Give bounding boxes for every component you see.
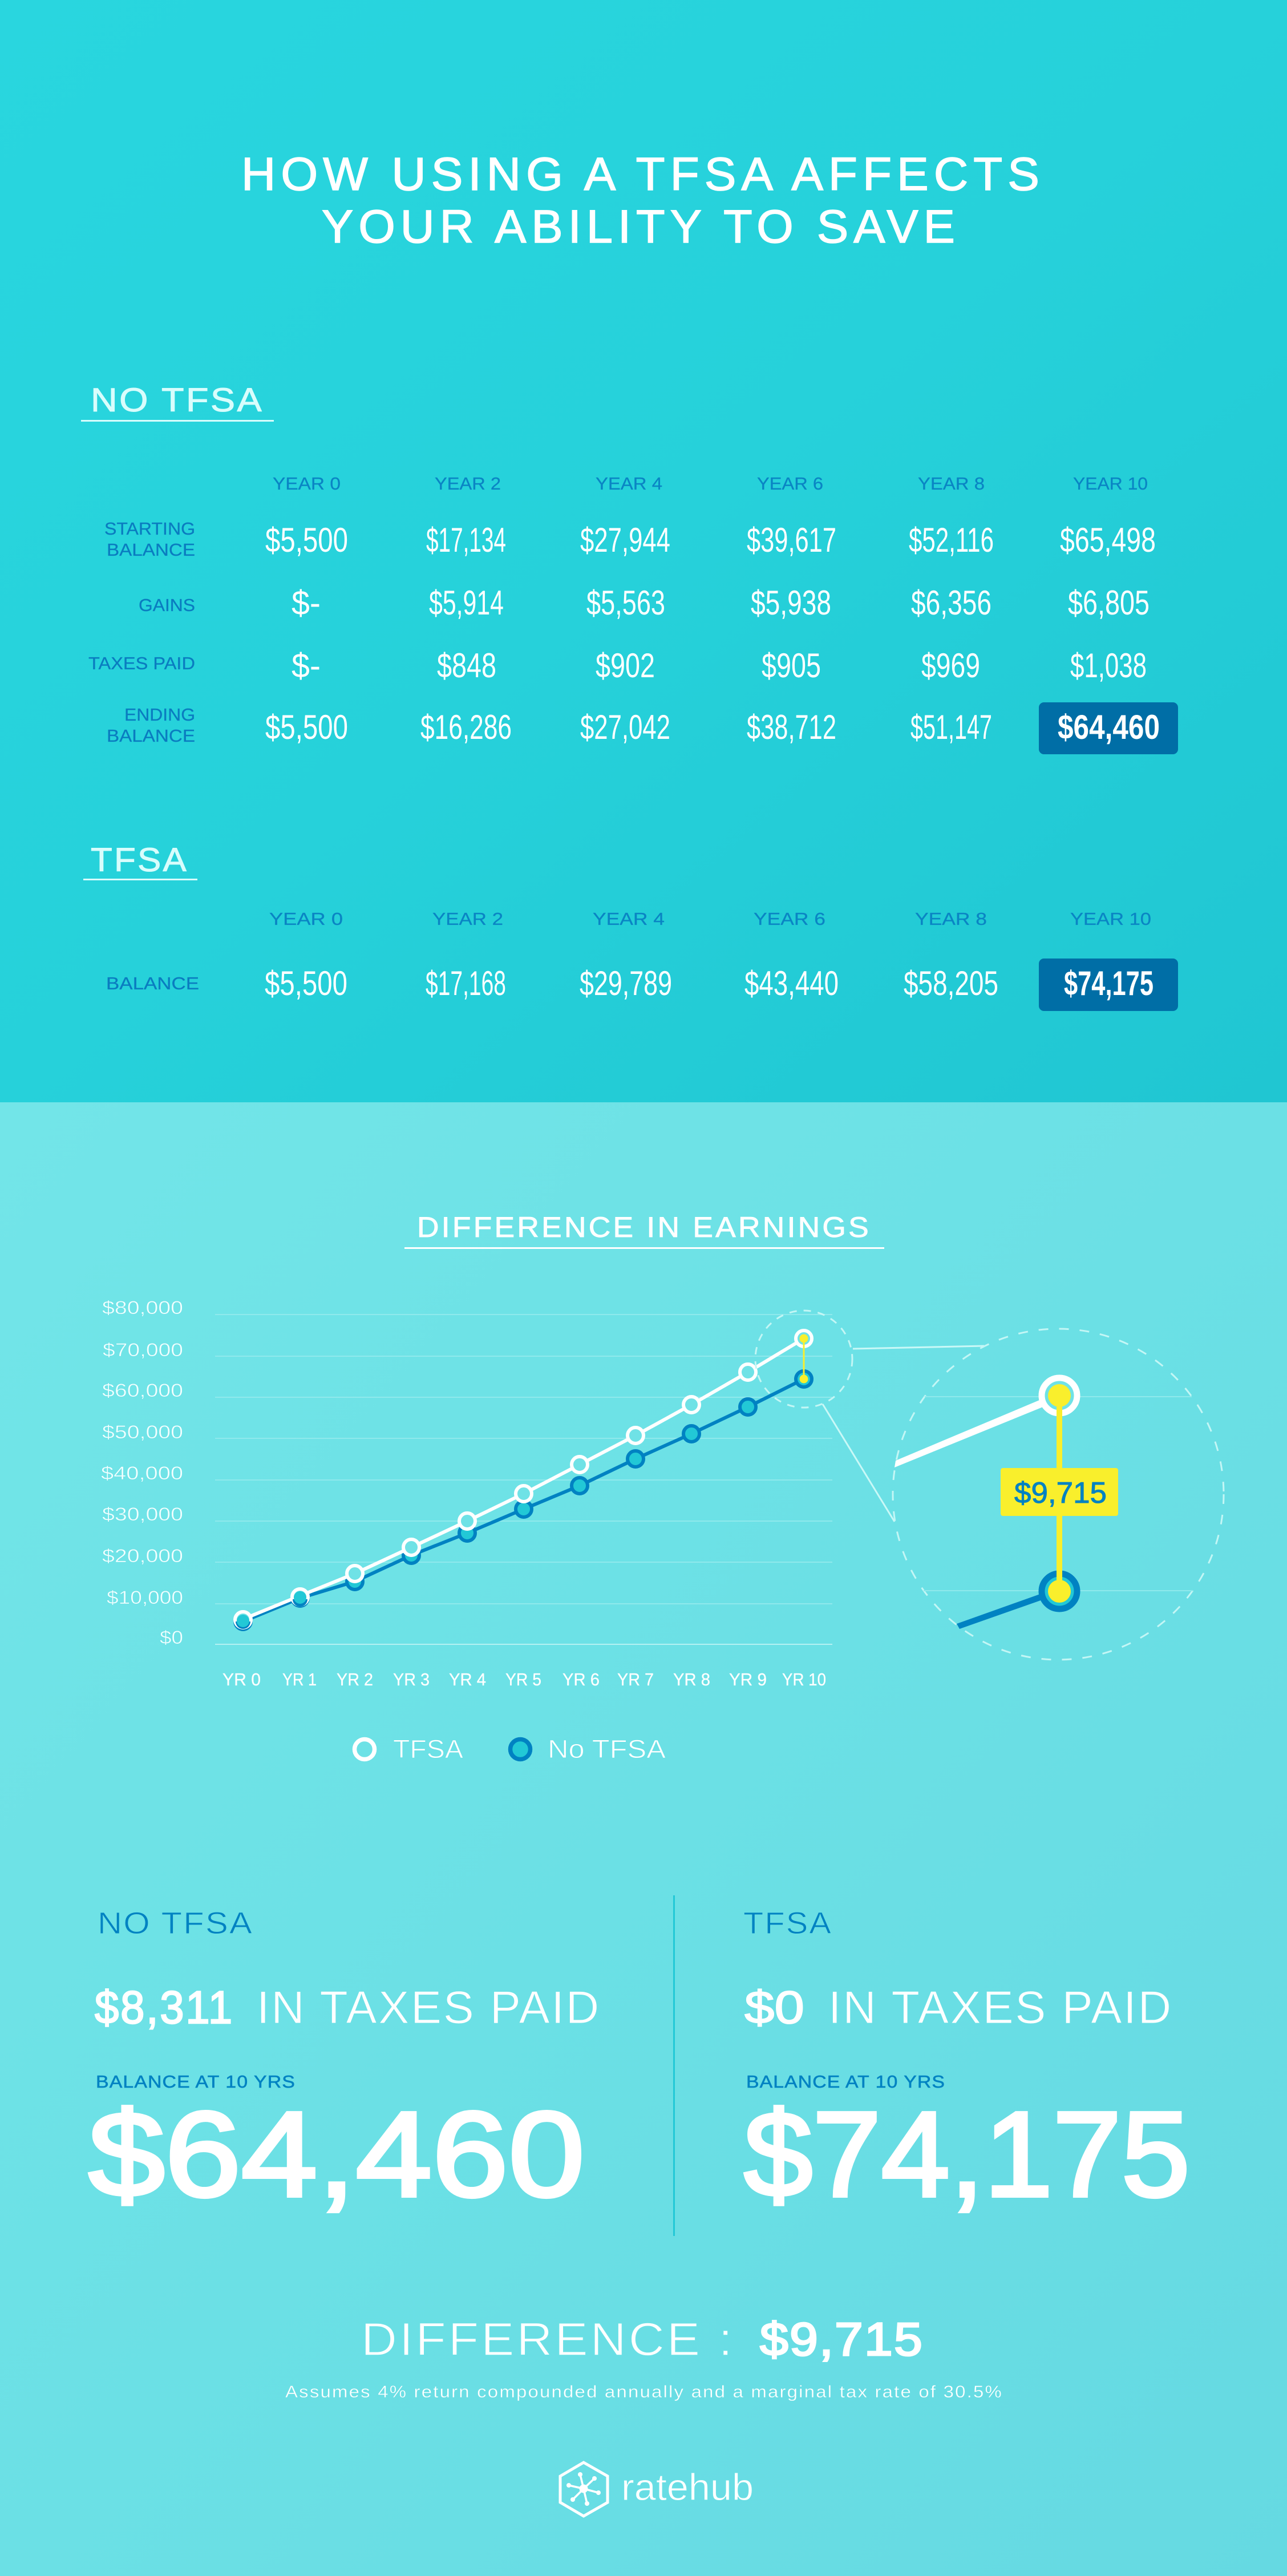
row: starting balance: $39,617 (747, 521, 836, 559)
panel: top background (0, 0, 1287, 1102)
x axis labels (222, 1669, 826, 1689)
row: taxes paid: TAXES PAID (88, 653, 195, 673)
row: taxes paid: $905 (762, 646, 821, 685)
chart legend (355, 1734, 666, 1764)
x axis labels: YR 7 (617, 1669, 654, 1689)
x axis labels: YR 3 (393, 1669, 430, 1689)
row: ending balance: $38,712 (747, 708, 836, 746)
row: ending balance: $27,042 (580, 708, 670, 746)
magnified chart detail (893, 1329, 1224, 1660)
heading: TFSA: TFSA (91, 842, 188, 879)
y axis labels: $60,000 (102, 1380, 183, 1401)
taxes paid line: IN TAXES PAID (257, 1982, 601, 2033)
dashed zoom circle: small (755, 1311, 852, 1408)
panel: no TFSA table (81, 382, 1178, 754)
small difference marker (800, 1334, 808, 1383)
row: ending balance: ENDING (124, 705, 195, 725)
row: balance: BALANCE (106, 973, 199, 993)
year headers: YEAR 10 (1073, 474, 1148, 494)
row: ending balance: $5,500 (265, 708, 348, 746)
title: YOUR ABILITY TO SAVE (322, 201, 960, 253)
x axis labels: YR 2 (337, 1669, 373, 1689)
row: gains: $5,563 (586, 584, 665, 622)
x axis labels: YR 10 (782, 1669, 826, 1689)
row: balance: $43,440 (744, 964, 839, 1002)
magnified no TFSA line (957, 1594, 1042, 1629)
difference total (361, 2314, 924, 2365)
row: gains (139, 584, 1150, 622)
year headers: YEAR 8 (915, 909, 987, 929)
x axis labels: YR 4 (449, 1669, 486, 1689)
row: taxes paid: $- (292, 646, 321, 685)
row: starting balance: $17,134 (426, 521, 506, 559)
dashed zoom circle: large (893, 1329, 1224, 1660)
year headers (273, 474, 1148, 494)
year headers: YEAR 4 (593, 909, 665, 929)
x axis labels: YR 5 (505, 1669, 541, 1689)
row: ending balance: BALANCE (107, 726, 195, 746)
row: gains: $6,805 (1068, 584, 1150, 622)
year headers: YEAR 6 (754, 909, 825, 929)
row: ending balance (107, 705, 992, 746)
taxes paid line: $0 (744, 1982, 804, 2033)
row: taxes paid: $848 (437, 646, 496, 685)
row: ending balance: $16,286 (420, 708, 512, 746)
row: taxes paid: $1,038 (1070, 646, 1147, 685)
title: HOW USING A TFSA AFFECTS (241, 148, 1045, 200)
row: gains: $- (292, 584, 321, 622)
magnified TFSA marker (1042, 1378, 1077, 1413)
row: balance: $5,500 (265, 964, 347, 1002)
difference total: DIFFERENCE : (361, 2314, 735, 2365)
footnote: Assumes 4% return compounded annually and a marginal tax rate of 30.5% (285, 2383, 1003, 2401)
summary heading: NO TFSA (98, 1906, 253, 1940)
balance value: $74,175 (744, 2086, 1190, 2222)
year headers: YEAR 4 (596, 474, 662, 494)
y axis labels: $70,000 (103, 1340, 183, 1360)
row: balance: $58,205 (904, 964, 998, 1002)
row: gains: $6,356 (911, 584, 991, 622)
heading: difference in earnings: DIFFERENCE IN EARNINGS (417, 1211, 871, 1243)
row: balance: $29,789 (580, 964, 672, 1002)
year headers: YEAR 10 (1070, 909, 1151, 929)
y axis labels (101, 1297, 183, 1648)
year headers: YEAR 2 (432, 909, 503, 929)
balance value: $64,460 (88, 2086, 585, 2222)
connector lines (823, 1346, 984, 1522)
summary: no TFSA (88, 1906, 601, 2222)
row: starting balance: $52,116 (909, 521, 994, 559)
row: gains: $5,938 (751, 584, 831, 622)
difference label (1001, 1468, 1118, 1516)
icon: hexagon star (560, 2462, 608, 2516)
balance label: BALANCE AT 10 YRS (96, 2072, 296, 2092)
y axis labels: $80,000 (102, 1297, 183, 1318)
row: taxes paid: $969 (921, 646, 980, 685)
legend: no TFSA (510, 1734, 666, 1764)
row: balance: $17,168 (426, 964, 506, 1002)
row: starting balance: $65,498 (1060, 521, 1156, 559)
wordmark: ratehub (621, 2466, 754, 2508)
magnified no TFSA marker (1042, 1574, 1077, 1609)
year headers: YEAR 0 (269, 909, 343, 929)
legend: TFSA: TFSA (393, 1734, 463, 1764)
series: no TFSA (235, 1371, 812, 1629)
callout: TFSA final balance: $74,175 (1064, 964, 1154, 1002)
y axis labels: $30,000 (102, 1504, 183, 1524)
heading: no TFSA: NO TFSA (91, 382, 264, 419)
row: gains: $5,914 (429, 584, 504, 622)
y axis labels: $40,000 (101, 1463, 183, 1483)
x axis labels: YR 6 (562, 1669, 600, 1689)
year headers: YEAR 2 (435, 474, 501, 494)
logo: ratehub (560, 2462, 754, 2516)
difference label: $9,715 (1014, 1477, 1107, 1510)
callout: no TFSA final balance (1039, 702, 1178, 754)
magnified TFSA line (895, 1400, 1043, 1467)
difference total: $9,715 (760, 2314, 924, 2365)
divider (673, 1895, 675, 2236)
row: ending balance: $51,147 (910, 708, 992, 746)
title (241, 148, 1045, 253)
x axis labels: YR 0 (222, 1669, 261, 1689)
year headers (269, 909, 1151, 929)
callout: no TFSA final balance: $64,460 (1058, 708, 1160, 746)
y axis labels: $10,000 (107, 1587, 183, 1608)
row: starting balance: $27,944 (580, 521, 670, 559)
yellow difference line (1048, 1384, 1071, 1603)
row: starting balance (104, 519, 1156, 560)
summary heading: TFSA (743, 1906, 832, 1940)
x axis labels: YR 1 (282, 1669, 317, 1689)
x axis labels: YR 9 (729, 1669, 767, 1689)
row: balance (106, 964, 998, 1002)
taxes paid line: IN TAXES PAID (828, 1982, 1173, 2033)
x axis labels: YR 8 (673, 1669, 710, 1689)
panel: bottom background (0, 1102, 1287, 2576)
taxes paid line (95, 1982, 601, 2033)
year headers: YEAR 8 (918, 474, 985, 494)
legend: TFSA (355, 1734, 463, 1764)
y axis labels: $0 (160, 1627, 183, 1648)
callout: TFSA final balance (1039, 959, 1178, 1011)
summary: TFSA (743, 1906, 1190, 2222)
taxes paid line: $8,311 (95, 1982, 234, 2033)
row: taxes paid: $902 (596, 646, 655, 685)
row: starting balance: $5,500 (265, 521, 348, 559)
line chart (101, 1297, 852, 1689)
panel: TFSA table (83, 842, 1178, 1011)
row: starting balance: STARTING (104, 519, 195, 539)
legend: no TFSA: No TFSA (548, 1734, 666, 1764)
balance label: BALANCE AT 10 YRS (746, 2072, 945, 2092)
y axis labels: $50,000 (102, 1422, 183, 1442)
year headers: YEAR 6 (757, 474, 823, 494)
series: TFSA (235, 1331, 812, 1629)
year headers: YEAR 0 (273, 474, 341, 494)
row: taxes paid (88, 646, 1147, 685)
row: starting balance: BALANCE (107, 540, 195, 560)
y axis labels: $20,000 (102, 1546, 183, 1566)
row: gains: GAINS (139, 595, 195, 615)
